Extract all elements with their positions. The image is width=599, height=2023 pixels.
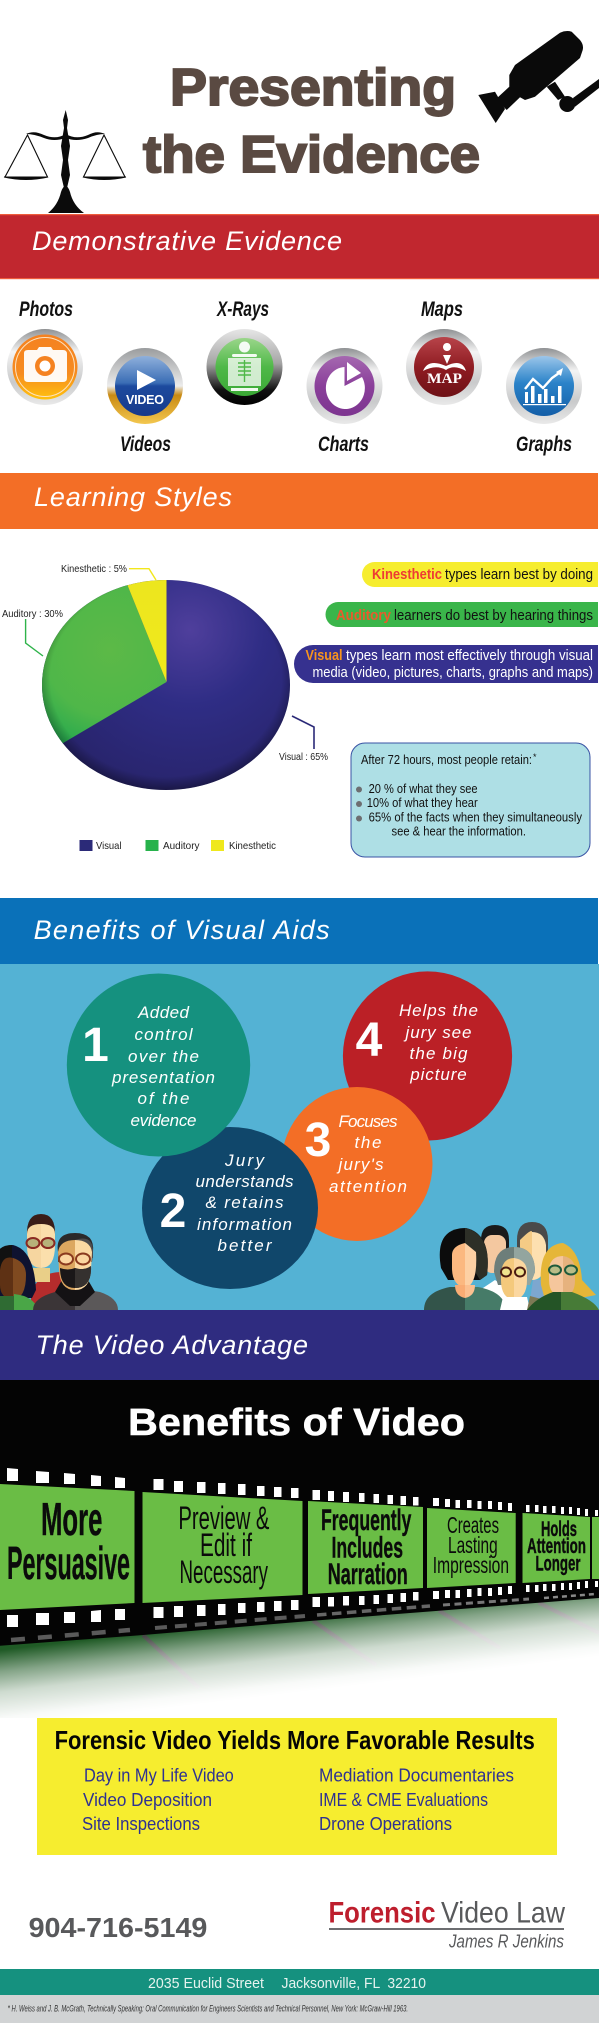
panel: retention facts: 10% of what they hear (367, 795, 478, 810)
icon: map button: MAP (427, 371, 462, 387)
panel: retention facts: 20 % of what they see (369, 781, 478, 796)
film reflection (0, 1590, 599, 1718)
film sprocket holes (7, 1468, 598, 1627)
panel: forensic video results: Drone Operations (319, 1814, 452, 1834)
benefit 4: 4 (356, 1014, 383, 1067)
benefit 2: understands (196, 1172, 294, 1191)
footnote bar (0, 1995, 599, 2023)
logo: Forensic Video Law (328, 1897, 565, 1952)
callout: kinesthetic learners (362, 562, 598, 587)
frame 2 text: Edit if (200, 1527, 252, 1563)
label: Photos: Photos (19, 298, 73, 321)
benefit 1: control (134, 1025, 194, 1044)
logo: Forensic Video Law: Video Law (441, 1897, 565, 1930)
benefit 1: evidence (130, 1111, 196, 1130)
callout: visual learners: Visual (306, 647, 342, 664)
panel: forensic video results (37, 1718, 557, 1855)
pie label: Auditory: Auditory : 30% (2, 608, 63, 620)
frame 5 text: Holds (541, 1518, 577, 1541)
benefit 3 (282, 1087, 432, 1241)
title (143, 59, 480, 184)
frame 1 text (7, 1493, 130, 1589)
benefit 2: Jury (224, 1151, 266, 1170)
benefit 4: jury see (404, 1023, 472, 1042)
panel: benefits of video (0, 1380, 599, 1718)
callout: auditory learners (326, 602, 598, 627)
frame 3 text: Frequently (321, 1504, 412, 1537)
section band: Demonstrative Evidence (0, 214, 599, 279)
panel: visual aid benefits (0, 964, 599, 1310)
pie label: Kinesthetic: Kinesthetic : 5% (61, 563, 127, 575)
benefit 1: of the (138, 1089, 190, 1108)
panel: retention facts: * (533, 752, 537, 762)
logo: Forensic Video Law: Forensic (328, 1897, 436, 1930)
frame 3 text: Includes (332, 1532, 403, 1565)
label: X-Rays: X-Rays (216, 298, 269, 321)
benefit 3: Focuses (338, 1112, 398, 1131)
benefit 3: jury's (336, 1155, 384, 1174)
pie chart: learning styles (42, 580, 290, 790)
frame 4 text: Creates (447, 1512, 499, 1538)
chart legend (80, 840, 276, 852)
benefit 4: the big (410, 1044, 468, 1063)
heading: Benefits of Video (128, 1402, 465, 1444)
panel: retention facts (351, 743, 590, 857)
title: Presenting (170, 59, 456, 117)
panel: forensic video results: Day in My Life Video (84, 1766, 234, 1786)
benefit 1 (67, 974, 250, 1156)
section band: The Video Advantage (0, 1310, 599, 1380)
icon: security camera (478, 31, 599, 123)
frame 5 text (527, 1518, 586, 1576)
address bar: 2035 Euclid Street (148, 1975, 265, 1992)
benefit 4 (343, 971, 512, 1141)
icon: scales of justice (4, 110, 126, 213)
label: Videos: Videos (120, 433, 171, 456)
benefit 1: presentation (111, 1068, 215, 1087)
film frames (0, 1484, 599, 1610)
icon: photos camera button (7, 329, 83, 405)
panel: forensic video results: IME & CME Evaluations (319, 1790, 488, 1810)
icon: x-ray button (206, 329, 282, 405)
benefit 2 (142, 1127, 318, 1289)
benefit 3: 3 (305, 1114, 331, 1167)
chart legend: Kinesthetic (229, 840, 276, 852)
frame 2 text: Necessary (180, 1554, 268, 1590)
panel: forensic video results: Video Deposition (83, 1790, 212, 1810)
pie label: Visual: Visual : 65% (279, 751, 328, 763)
frame 4 text: Impression (433, 1552, 509, 1578)
section band: Learning Styles: Learning Styles (34, 482, 232, 512)
callout: auditory learners: Auditory (336, 607, 392, 624)
section band: Benefits of Visual Aids (0, 898, 598, 964)
frame 2 text: Preview & (178, 1500, 269, 1536)
logo: Forensic Video Law: James R Jenkins (448, 1932, 564, 1952)
panel: forensic video results: Site Inspections (82, 1814, 200, 1834)
frame 2 text (178, 1500, 269, 1590)
panel: forensic video results: Mediation Documentaries (319, 1766, 514, 1786)
benefit 1: over the (128, 1047, 199, 1066)
icon: graph button (506, 348, 582, 424)
icon: chart button (306, 348, 382, 424)
section band: Benefits of Visual Aids: Benefits of Visual Aids (34, 915, 330, 945)
panel: retention facts: see & hear the information. (392, 824, 526, 839)
address bar: Jacksonville, FL 32210 (282, 1975, 426, 1992)
chart legend: Auditory (163, 840, 200, 852)
chart legend: Visual (96, 840, 122, 852)
people: left jury group (0, 1214, 118, 1310)
address bar (0, 1969, 599, 1995)
benefit 4: Helps the (399, 1001, 478, 1020)
icon: video button (107, 348, 183, 424)
section band: Learning Styles (0, 473, 598, 529)
panel: retention facts: After 72 hours, most people retain: (361, 752, 532, 767)
label: Maps: Maps (421, 298, 463, 321)
pie label: Auditory (2, 608, 63, 656)
pie label: Kinesthetic (61, 563, 156, 580)
benefit 3: attention (329, 1177, 407, 1196)
frame 4 text: Lasting (448, 1532, 498, 1558)
label: Graphs: Graphs (516, 433, 572, 456)
frame 4 text (433, 1512, 509, 1578)
benefit 2: better (218, 1236, 273, 1255)
label: Charts: Charts (318, 433, 369, 456)
frame 3 text (321, 1504, 412, 1591)
title: the Evidence (143, 126, 480, 184)
icon: map button (406, 329, 482, 405)
benefit 2: 2 (160, 1185, 186, 1238)
phone number: 904-716-5149 (29, 1912, 207, 1943)
benefit 3: the (354, 1133, 382, 1152)
benefit 4: picture (409, 1065, 467, 1084)
section band: The Video Advantage: The Video Advantage (36, 1330, 308, 1360)
pie label: Visual (279, 716, 328, 763)
benefit 1: Added (137, 1003, 190, 1022)
benefit 2: information (197, 1215, 292, 1234)
frame 1 text: More (41, 1493, 102, 1545)
section band: Demonstrative Evidence: Demonstrative Evidence (32, 226, 342, 256)
callout: kinesthetic learners: Kinesthetic (372, 566, 442, 583)
callout: visual learners (294, 645, 598, 683)
benefit 1: 1 (82, 1019, 109, 1072)
icon: video button: VIDEO (126, 393, 164, 407)
people: right jury group (424, 1222, 599, 1310)
frame 1 text: Persuasive (7, 1537, 130, 1589)
benefit 2: & retains (206, 1193, 284, 1212)
frame 3 text: Narration (328, 1558, 408, 1591)
